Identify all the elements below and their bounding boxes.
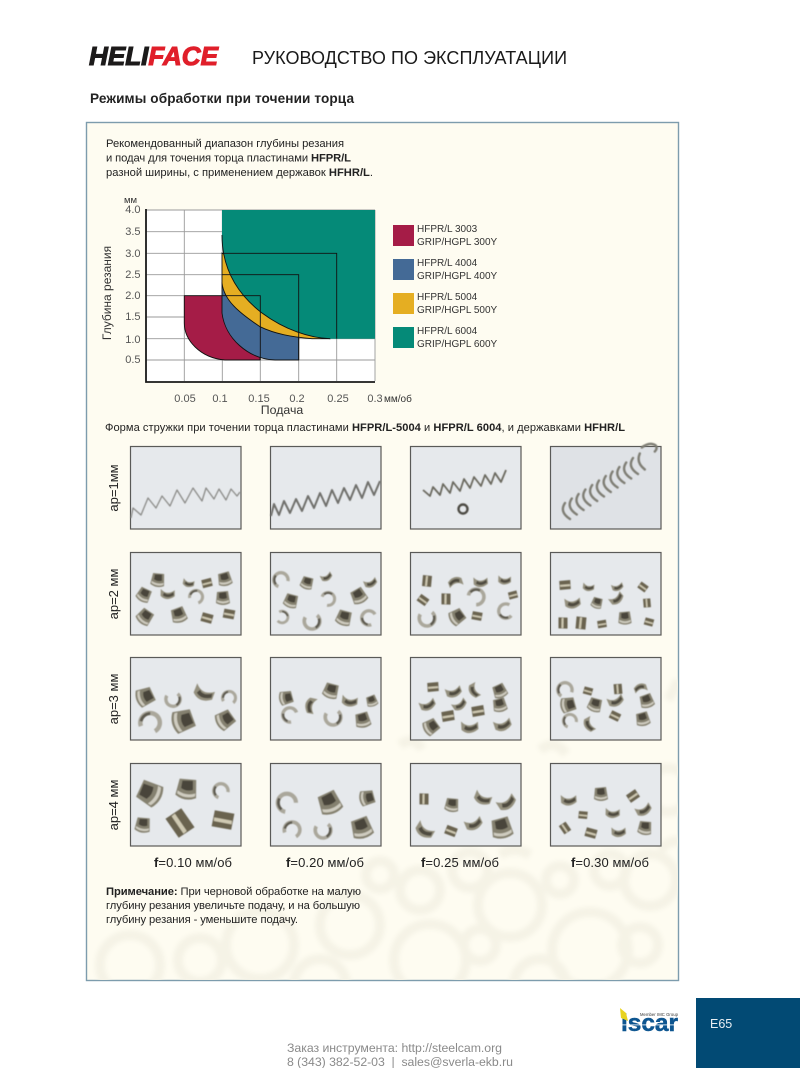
y axis ticks: 1.0 — [125, 334, 140, 346]
photo: ap=1 f=0.10 — [130, 446, 241, 529]
row labels — [106, 464, 121, 830]
legend: 3003 — [393, 224, 498, 248]
photo: ap=4 f=0.25 — [410, 764, 521, 846]
region: HFPR/L 3003 — [184, 296, 260, 360]
note: глубину резания - уменьшите подачу. — [106, 914, 298, 926]
x axis ticks: 0.1 — [212, 393, 228, 405]
page number tab: E65 — [710, 1017, 732, 1031]
boundary boxes — [222, 253, 337, 360]
region: HFPR/L 5004 — [222, 253, 330, 339]
panel: main — [86, 122, 690, 1011]
label: ap=3: ap=3 мм — [106, 674, 121, 724]
y axis ticks: 3.0 — [125, 248, 140, 260]
photo: ap=3 f=0.20 — [270, 658, 381, 740]
legend: 6004: GRIP/HGPL 600Y — [417, 339, 498, 350]
note: Примечание: При черновой обработке на малую — [106, 886, 361, 898]
page number tab — [696, 998, 800, 1068]
footer contacts: Заказ инструмента: http://steelcam.org — [287, 1041, 502, 1055]
y axis ticks: 1.5 — [125, 311, 140, 323]
label: ap=1: ap=1мм — [106, 464, 121, 512]
logo: Iscar: iscar — [621, 1010, 678, 1037]
legend: 3003: HFPR/L 3003 — [417, 224, 478, 235]
axes — [146, 209, 375, 382]
x axis ticks — [174, 393, 383, 405]
legend — [393, 224, 498, 350]
y axis ticks: 2.0 — [125, 290, 140, 302]
label: ap=4: ap=4 мм — [106, 780, 121, 830]
x axis ticks: 0.25 — [327, 393, 349, 405]
photo: ap=4 f=0.30 — [550, 764, 661, 846]
intro text: Рекомендованный диапазон глубины резания — [106, 138, 344, 150]
photo: ap=2 f=0.25 — [410, 552, 521, 635]
y axis ticks: 4.0 — [125, 204, 140, 216]
feed: 0.30: f=0.30 мм/об — [571, 855, 649, 870]
x axis ticks: 0.3 — [367, 393, 383, 405]
photo: ap=2 f=0.20 — [270, 552, 381, 635]
feed labels — [154, 855, 649, 870]
region: HFPR/L 4004 — [222, 283, 299, 360]
photo: ap=3 f=0.10 — [130, 658, 241, 740]
feed: 0.20: f=0.20 мм/об — [286, 855, 364, 870]
logo: HELIFACE: HELIFACE — [89, 41, 219, 71]
y axis ticks: 0.5 — [125, 354, 140, 366]
y axis ticks — [125, 204, 140, 366]
photo: ap=1 f=0.30 — [550, 444, 661, 529]
legend: 4004: GRIP/HGPL 400Y — [417, 271, 498, 282]
chart: depth of cut vs feed — [100, 195, 412, 417]
intro text: разной ширины, с применением державок HFHR/L. — [106, 167, 373, 179]
footer contacts — [287, 1041, 513, 1068]
photo: ap=2 f=0.10 — [130, 552, 241, 635]
region: HFPR/L 6004 — [222, 210, 375, 339]
legend: 4004 — [393, 258, 498, 282]
photo: ap=3 f=0.25 — [410, 658, 521, 740]
chip form caption: Форма стружки при точении торца пластинами HFPR/L-5004 и HFPR/L 6004, и державками HFHR/L — [105, 422, 625, 434]
photo: ap=1 f=0.20 — [270, 446, 381, 529]
legend: 6004: HFPR/L 6004 — [417, 326, 478, 337]
y axis title: Глубина резания — [100, 246, 114, 340]
x axis title: Подача — [261, 403, 303, 417]
legend: 5004: HFPR/L 5004 — [417, 292, 478, 303]
x axis ticks: 0.2 — [289, 393, 305, 405]
intro text — [106, 138, 373, 179]
x axis ticks: 0.05 — [174, 393, 196, 405]
logo: Iscar: Member IMC Group — [640, 1012, 679, 1017]
legend: 5004: GRIP/HGPL 500Y — [417, 305, 498, 316]
photo: ap=2 f=0.30 — [550, 552, 661, 635]
note: глубину резания увеличьте подачу, и на большую — [106, 900, 360, 912]
plot area — [146, 210, 375, 382]
y unit: мм — [124, 195, 137, 206]
section heading: Режимы обработки при точении торца — [90, 91, 354, 106]
y axis ticks: 2.5 — [125, 269, 140, 281]
legend: 3003: GRIP/HGPL 300Y — [417, 237, 498, 248]
label: ap=2: ap=2 мм — [106, 569, 121, 619]
x unit: мм/об — [384, 393, 412, 405]
photo: ap=4 f=0.20 — [270, 764, 381, 846]
feed: 0.10: f=0.10 мм/об — [154, 855, 232, 870]
photo: ap=4 f=0.10 — [130, 764, 241, 846]
photo: ap=1 f=0.25 — [410, 446, 521, 529]
note — [106, 886, 361, 926]
feed: 0.25: f=0.25 мм/об — [421, 855, 499, 870]
intro text: и подач для точения торца пластинами HFPR/L — [106, 152, 351, 164]
x axis ticks: 0.15 — [248, 393, 270, 405]
y axis ticks: 3.5 — [125, 226, 140, 238]
legend: 4004: HFPR/L 4004 — [417, 258, 478, 269]
legend: 5004 — [393, 292, 498, 316]
title: РУКОВОДСТВО ПО ЭКСПЛУАТАЦИИ — [252, 48, 567, 68]
photo: ap=3 f=0.30 — [550, 658, 661, 740]
legend: 6004 — [393, 326, 498, 350]
